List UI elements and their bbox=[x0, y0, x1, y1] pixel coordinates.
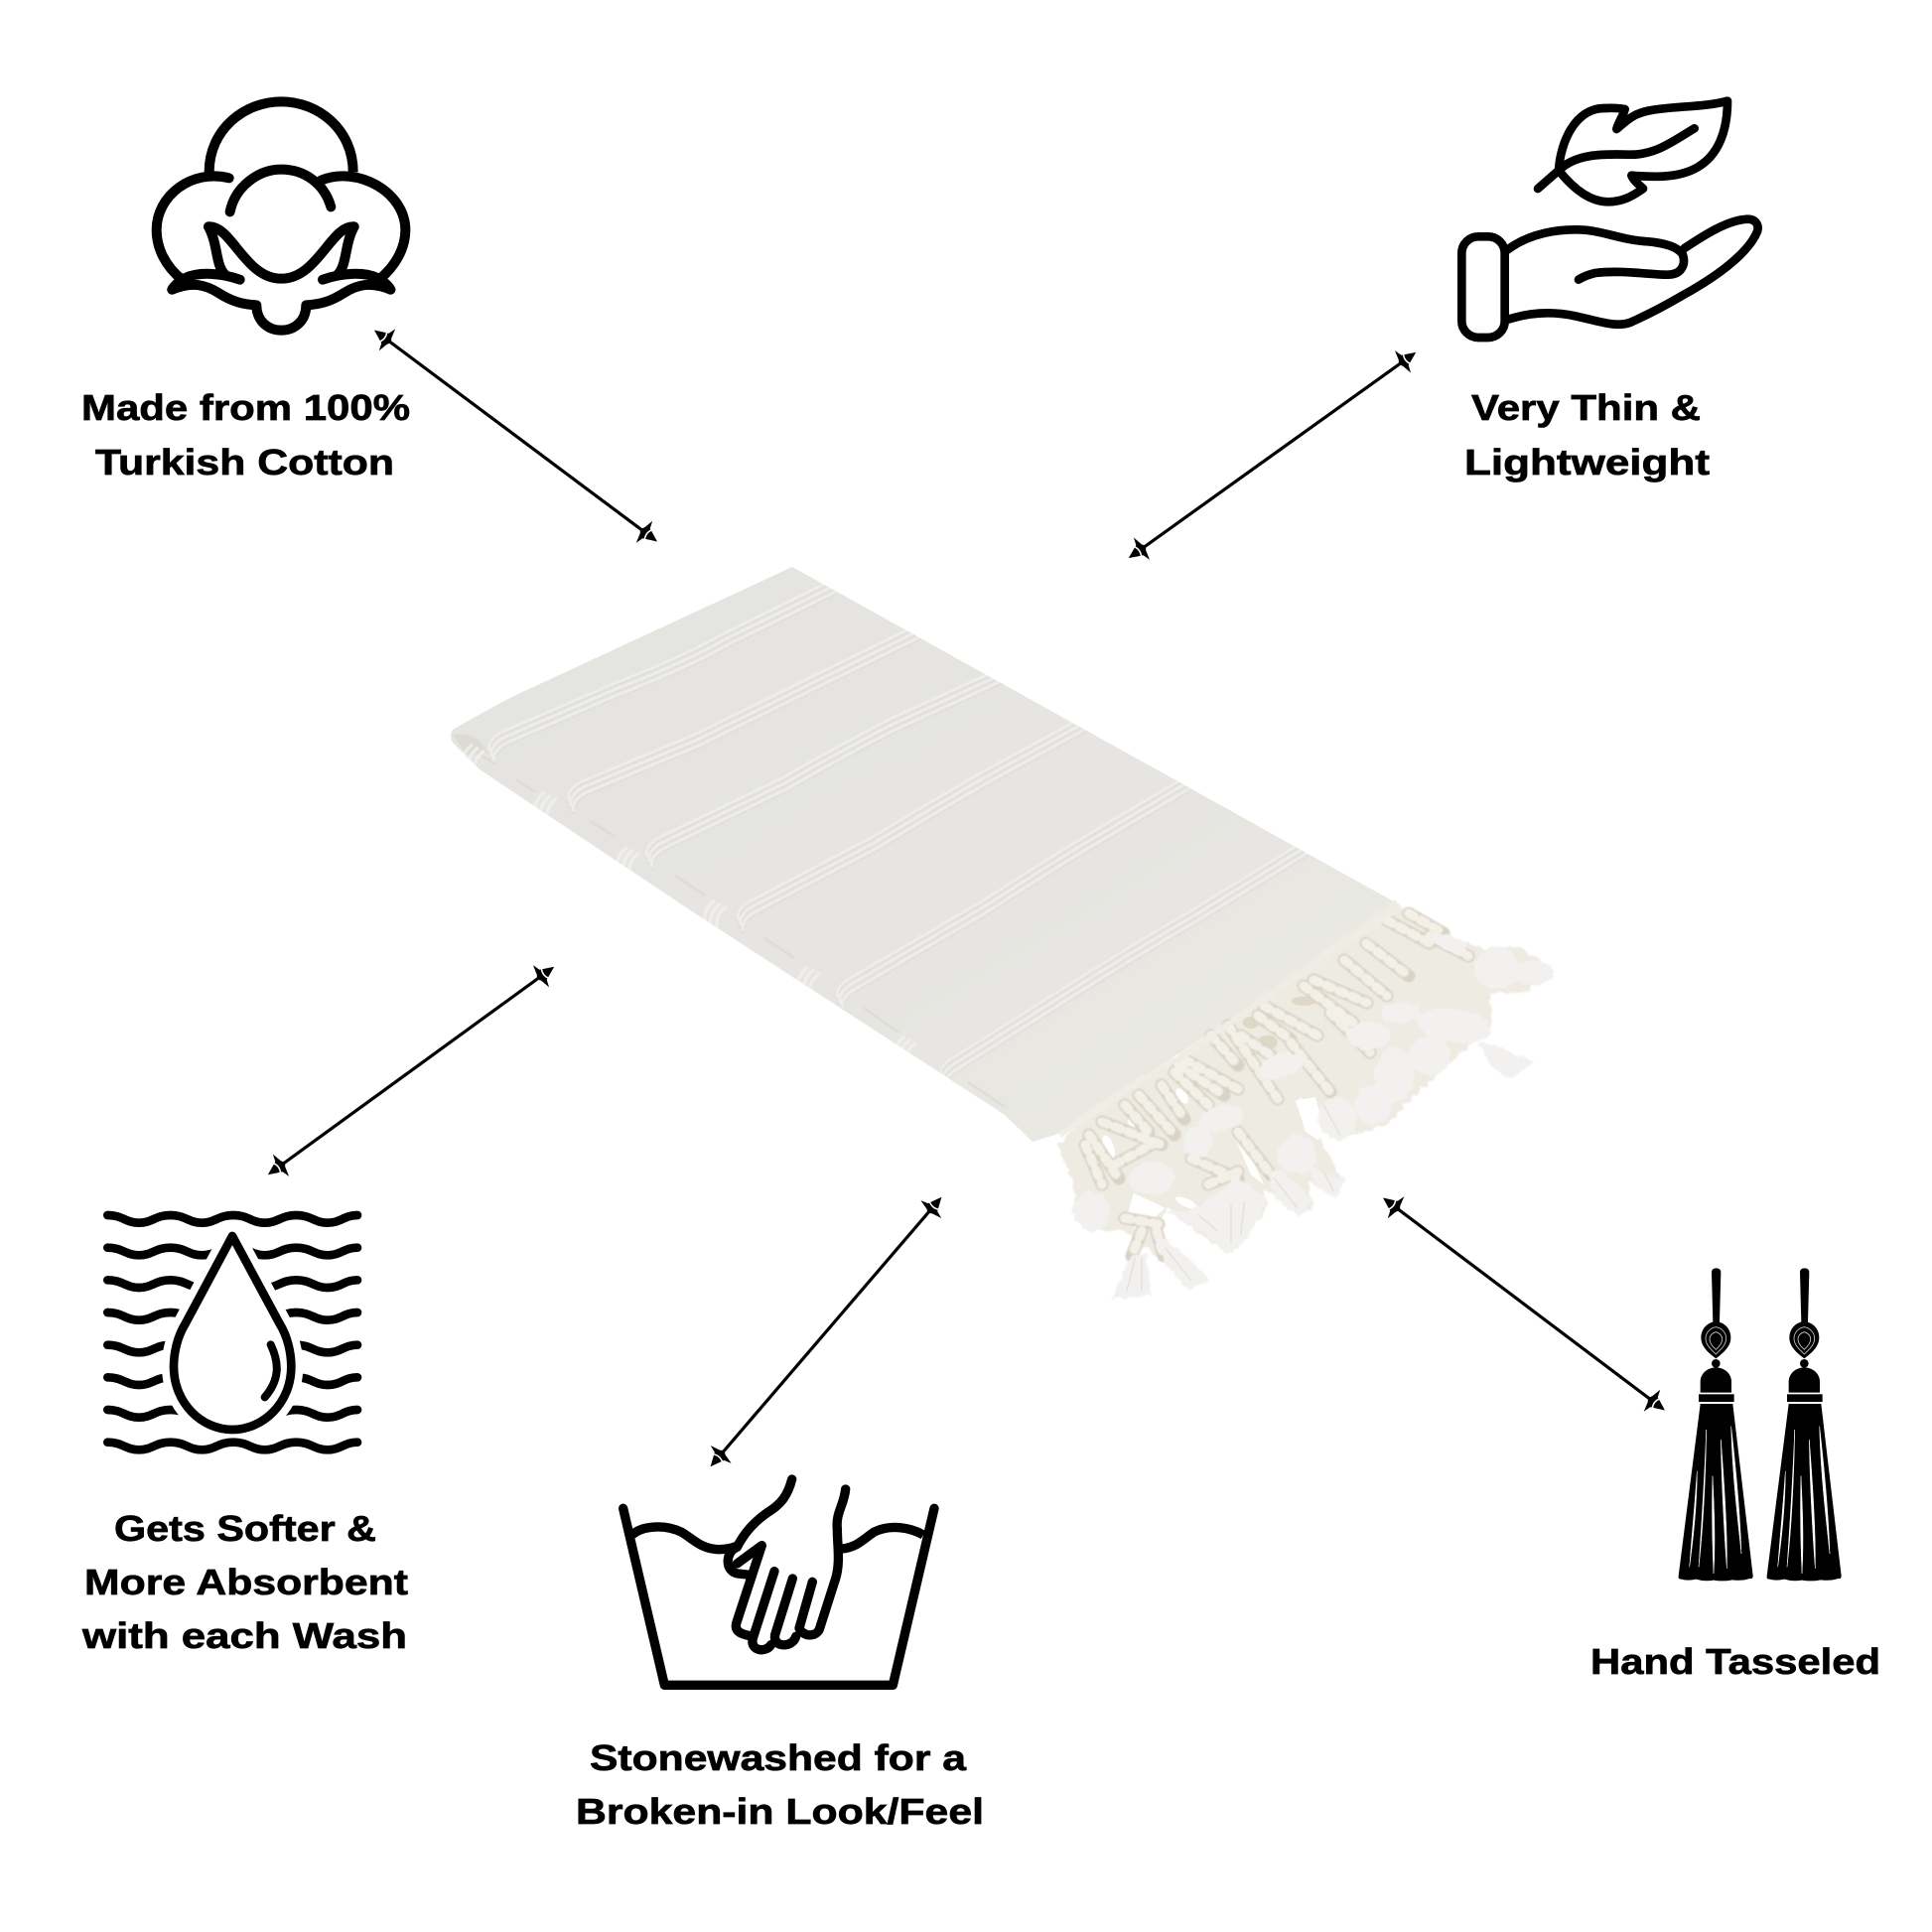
arrow: lightweight to towel bbox=[1121, 342, 1424, 569]
panel: turkish cotton bbox=[81, 101, 410, 483]
heading: turkish cotton: Turkish Cotton bbox=[95, 442, 394, 483]
arrow: towel to stonewashed bbox=[700, 1188, 952, 1475]
panel: thin and lightweight bbox=[1461, 101, 1758, 483]
icon: water drop on waves bbox=[107, 1215, 357, 1449]
shaded pockets bbox=[1243, 997, 1316, 1049]
arrow: towel to tassels bbox=[1375, 1186, 1673, 1422]
icon: cotton boll bbox=[157, 101, 405, 331]
heading: softer and absorbent: Gets Softer & bbox=[114, 1508, 376, 1549]
icon: hand with leaf bbox=[1461, 101, 1758, 338]
heading: turkish cotton bbox=[81, 387, 410, 483]
fringe gaps bbox=[1100, 1086, 1321, 1233]
towel body bbox=[451, 567, 1401, 1142]
heading: stonewashed: Stonewashed for a bbox=[590, 1737, 967, 1778]
panel: hand tasseled bbox=[1590, 1268, 1880, 1682]
icon: hand in wash basin bbox=[623, 1479, 934, 1685]
tassel ends bbox=[1074, 929, 1553, 1299]
tassel strand shading bbox=[1127, 1105, 1340, 1291]
towel stripes bbox=[463, 582, 1318, 1107]
hem stripes on lower fold bbox=[463, 745, 916, 1064]
fold shadows bbox=[477, 753, 1005, 1107]
heading: thin and lightweight: Lightweight bbox=[1464, 442, 1710, 483]
heading: softer and absorbent: with each Wash bbox=[81, 1615, 407, 1656]
heading: hand tasseled: Hand Tasseled bbox=[1590, 1641, 1880, 1682]
fringe and tassels bbox=[1057, 900, 1554, 1299]
right tassel bbox=[1767, 1268, 1842, 1581]
arrow: towel to absorbent bbox=[260, 956, 562, 1185]
heading: thin and lightweight: Very Thin & bbox=[1471, 387, 1701, 428]
panel: stonewashed bbox=[576, 1479, 984, 1832]
left tassel bbox=[1679, 1268, 1753, 1581]
heading: turkish cotton: Made from 100% bbox=[81, 387, 410, 428]
fringe silhouette bbox=[1057, 900, 1554, 1257]
icon: two tassels bbox=[1679, 1268, 1842, 1581]
heading: thin and lightweight bbox=[1464, 387, 1710, 483]
heading: stonewashed: Broken-in Look/Feel bbox=[576, 1791, 984, 1832]
woven edge bbox=[1060, 905, 1401, 1135]
arrow: cotton to towel bbox=[366, 320, 665, 552]
towel folded end bbox=[453, 735, 488, 755]
twisted cords bbox=[1085, 913, 1468, 1256]
panel: softer and absorbent bbox=[81, 1215, 408, 1656]
heading: softer and absorbent bbox=[81, 1508, 408, 1656]
panel: towel photo bbox=[451, 567, 1554, 1299]
heading: softer and absorbent: More Absorbent bbox=[84, 1562, 408, 1602]
heading: stonewashed bbox=[576, 1737, 984, 1832]
